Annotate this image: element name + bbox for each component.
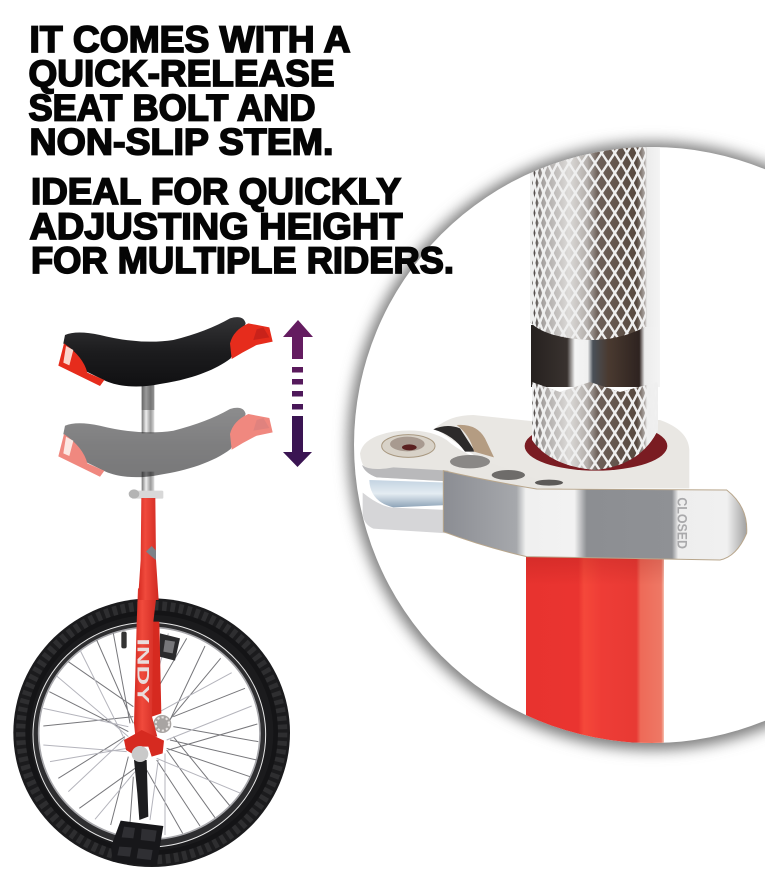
heading: first statement: NON-SLIP STEM. bbox=[30, 122, 334, 162]
upper lever lobe bbox=[360, 431, 563, 490]
lever front face bbox=[443, 471, 747, 560]
unicycle wheel bbox=[13, 588, 290, 867]
heading: second statement: ADJUSTING HEIGHT bbox=[30, 206, 403, 247]
tire bbox=[13, 598, 290, 867]
clamp dome bolt bbox=[382, 435, 435, 457]
fork blades bbox=[134, 588, 161, 737]
magnified circle: seat clamp close-up bbox=[348, 140, 765, 750]
red frame tube bbox=[138, 498, 159, 600]
heading: first statement bbox=[28, 19, 350, 162]
heading: first statement: SEAT BOLT AND bbox=[28, 88, 316, 128]
chrome seat post band bbox=[531, 325, 660, 387]
clamp bolt barrel bbox=[369, 480, 448, 507]
frame badge bbox=[146, 546, 156, 560]
sprocket hub bbox=[153, 715, 171, 733]
lever holes bbox=[450, 455, 563, 486]
clamp ring plate bbox=[433, 415, 689, 488]
heading: first statement: QUICK-RELEASE bbox=[28, 53, 334, 94]
red frame tube bbox=[526, 545, 664, 745]
circle shadow bbox=[348, 142, 765, 750]
heading: second statement: IDEAL FOR QUICKLY bbox=[31, 171, 401, 212]
heading: second statement bbox=[30, 171, 454, 281]
lower fork lobe bbox=[363, 493, 448, 533]
stamped word CLOSED: CLOSED bbox=[674, 497, 690, 549]
heading: first statement: IT COMES WITH A bbox=[30, 19, 350, 60]
fork crown bbox=[124, 730, 164, 757]
height adjustment arrow bbox=[283, 320, 313, 467]
rear pedal bbox=[121, 632, 180, 661]
circle background bbox=[354, 147, 765, 743]
front pedal bbox=[111, 821, 163, 866]
seat post and frame tube bbox=[129, 382, 163, 600]
rim bbox=[33, 622, 266, 847]
quick-release lever bbox=[360, 431, 747, 560]
knurled seat post, upper section bbox=[530, 140, 660, 340]
magnified contents bbox=[360, 140, 747, 745]
spokes bbox=[43, 633, 258, 835]
crank arm bbox=[134, 760, 148, 820]
saddle, lowered ghost position bbox=[58, 408, 273, 477]
fork lettering: INDY bbox=[134, 638, 153, 703]
saddle, raised position bbox=[58, 317, 273, 386]
crank cap bbox=[132, 746, 148, 762]
knurled seat post, lower section bbox=[530, 380, 660, 472]
heading: second statement: FOR MULTIPLE RIDERS. bbox=[31, 240, 454, 281]
seat post, upper visible part bbox=[142, 382, 154, 433]
seat post, lower visible part bbox=[142, 472, 154, 492]
seat clamp bbox=[129, 489, 163, 499]
